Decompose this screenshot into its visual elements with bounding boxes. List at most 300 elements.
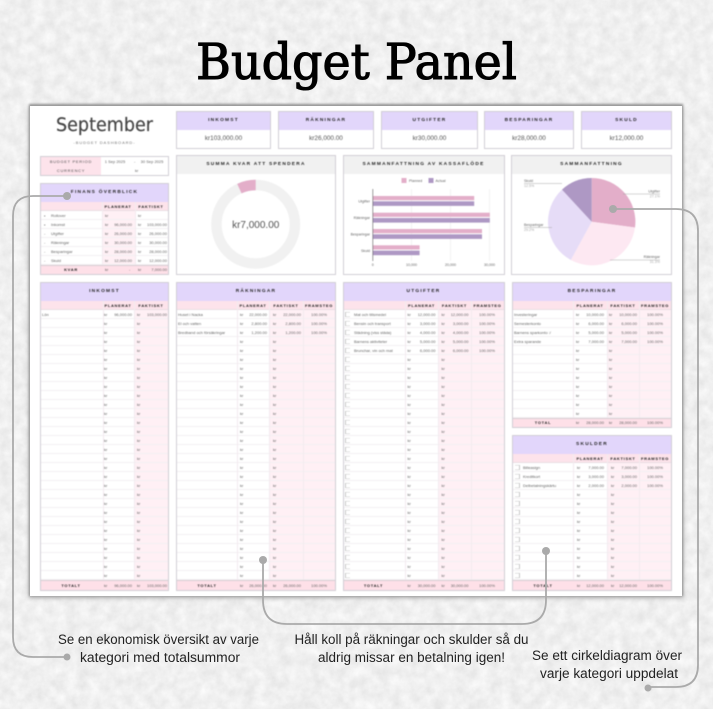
panel: finans överblick: - bbox=[44, 258, 45, 263]
table: inkomst: kr bbox=[137, 357, 140, 362]
table: skulder: 7,000.00 bbox=[588, 465, 604, 470]
table: inkomst: kr bbox=[137, 429, 140, 434]
panel: finans överblick: - bbox=[129, 267, 130, 272]
table: inkomst: kr bbox=[104, 492, 107, 497]
pie chart: 31.3% bbox=[650, 260, 661, 264]
panel: finans överblick: • bbox=[44, 213, 45, 218]
table: besparingar: kr bbox=[576, 312, 579, 317]
table: utgifter: 6,000.00 bbox=[420, 348, 436, 353]
table: skulder: Billeasign bbox=[523, 465, 540, 470]
table: inkomst: kr bbox=[104, 456, 107, 461]
table: skulder: kr bbox=[611, 474, 614, 479]
table: skulder: kr bbox=[611, 583, 614, 588]
table: besparingar: 6,000.00 bbox=[621, 321, 637, 326]
table: utgifter: kr bbox=[408, 420, 411, 425]
table: inkomst: kr bbox=[137, 348, 140, 353]
table: utgifter: kr bbox=[442, 384, 445, 389]
panel: finans överblick: kr bbox=[105, 249, 108, 254]
table: inkomst: kr bbox=[137, 492, 140, 497]
table: räkningar: kr bbox=[273, 501, 276, 506]
panel: finans överblick: kr bbox=[105, 213, 108, 218]
table: utgifter: kr bbox=[442, 447, 445, 452]
kpi card: räkningar bbox=[279, 112, 373, 148]
table: inkomst: FAKTISKT bbox=[138, 303, 164, 308]
table: räkningar: kr bbox=[273, 348, 276, 353]
bar chart: 10,000 bbox=[406, 263, 416, 267]
table: utgifter: kr bbox=[408, 375, 411, 380]
table: skulder: SKULDER bbox=[576, 442, 608, 447]
table: räkningar: kr bbox=[240, 583, 243, 588]
table: inkomst: kr bbox=[137, 573, 140, 578]
panel: finans överblick: 28,000.00 bbox=[149, 249, 167, 254]
pie chart: Räkningar bbox=[644, 255, 661, 259]
kpi card: besparingar bbox=[485, 112, 573, 148]
table: räkningar bbox=[177, 283, 335, 590]
table: utgifter: Barnens aktiviteter bbox=[354, 339, 387, 344]
table: utgifter: 4,000.00 bbox=[420, 330, 436, 335]
table: skulder: kr bbox=[611, 465, 614, 470]
table: inkomst: kr bbox=[104, 357, 107, 362]
table: räkningar: kr bbox=[240, 483, 243, 488]
kpi card: inkomst bbox=[177, 112, 270, 148]
table: inkomst: kr bbox=[137, 528, 140, 533]
table: besparingar: 100.00% bbox=[647, 312, 663, 317]
table: utgifter: FRAMSTEG bbox=[473, 303, 502, 308]
month heading: September bbox=[56, 114, 153, 136]
table: räkningar: kr bbox=[240, 402, 243, 407]
table: besparingar: kr bbox=[609, 312, 612, 317]
table: inkomst: kr bbox=[137, 537, 140, 542]
table: besparingar bbox=[513, 283, 671, 427]
table: inkomst: kr bbox=[104, 312, 107, 317]
table: inkomst: kr bbox=[104, 384, 107, 389]
kpi card: besparingar: kr28,000.00 bbox=[512, 135, 546, 142]
table: inkomst: kr bbox=[137, 393, 140, 398]
table: utgifter: kr bbox=[442, 456, 445, 461]
table: besparingar: kr bbox=[576, 393, 579, 398]
table: inkomst: kr bbox=[104, 474, 107, 479]
panel: finans överblick: 96,000.00 bbox=[114, 222, 132, 227]
table: räkningar: kr bbox=[240, 357, 243, 362]
table: inkomst: TOTALT bbox=[61, 583, 81, 588]
table: inkomst: kr bbox=[137, 465, 140, 470]
table: inkomst: kr bbox=[104, 573, 107, 578]
table: inkomst: PLANERAT bbox=[104, 303, 132, 308]
bar chart: Planned bbox=[408, 179, 422, 183]
panel: finans överblick: Utgifter bbox=[51, 231, 64, 236]
table: skulder: kr bbox=[577, 573, 580, 578]
table: räkningar: FRAMSTEG bbox=[305, 303, 333, 308]
table: utgifter: kr bbox=[408, 366, 411, 371]
table: skulder: kr bbox=[577, 537, 580, 542]
budget period box: CURRENCY bbox=[57, 168, 85, 173]
table: räkningar: kr bbox=[273, 411, 276, 416]
table: utgifter: kr bbox=[442, 393, 445, 398]
table: besparingar: kr bbox=[609, 357, 612, 362]
table: utgifter: kr bbox=[408, 321, 411, 326]
table: utgifter: kr bbox=[442, 438, 445, 443]
table: utgifter: kr bbox=[442, 573, 445, 578]
panel: finans överblick: 7,000.00 bbox=[151, 267, 167, 272]
table: inkomst: kr bbox=[137, 474, 140, 479]
caption: cirkeldiagram: varje kategori uppdelat bbox=[540, 666, 678, 681]
table: räkningar: 100.00% bbox=[311, 312, 327, 317]
table: utgifter: 30,000.00 bbox=[451, 583, 468, 588]
table: utgifter: 100.00% bbox=[479, 583, 495, 588]
table: inkomst: kr bbox=[137, 312, 140, 317]
table: räkningar: kr bbox=[273, 357, 276, 362]
budget period box: - bbox=[134, 159, 135, 164]
table: inkomst: kr bbox=[137, 438, 140, 443]
bar chart: 20,000 bbox=[444, 263, 456, 267]
table: räkningar: kr bbox=[240, 438, 243, 443]
table: inkomst: kr bbox=[137, 411, 140, 416]
bar chart bbox=[350, 177, 496, 267]
table: räkningar: kr bbox=[273, 312, 276, 317]
caption: räkningar och skulder: Håll koll på räkningar och skulder så du bbox=[294, 632, 528, 647]
table: besparingar: 10,000.00 bbox=[586, 312, 604, 317]
table: besparingar: 6,000.00 bbox=[588, 321, 604, 326]
panel: finans överblick: kr bbox=[138, 231, 141, 236]
kpi card: utgifter bbox=[382, 112, 477, 148]
table: räkningar: kr bbox=[273, 510, 276, 515]
table: besparingar: kr bbox=[576, 348, 579, 353]
table: utgifter: kr bbox=[408, 456, 411, 461]
table: besparingar: kr bbox=[609, 339, 612, 344]
table: räkningar: RÄKNINGAR bbox=[236, 289, 276, 294]
table: räkningar: kr bbox=[273, 564, 276, 569]
caption: cirkeldiagram bbox=[532, 648, 683, 681]
caption: räkningar och skulder bbox=[294, 632, 528, 665]
table: besparingar: kr bbox=[609, 411, 612, 416]
table: utgifter: 30,000.00 bbox=[418, 583, 436, 588]
table: utgifter: Städning (viss städa) bbox=[354, 330, 391, 335]
table: besparingar: kr bbox=[609, 420, 612, 425]
table: besparingar: kr bbox=[576, 384, 579, 389]
table: besparingar: 100.00% bbox=[647, 420, 663, 425]
table: inkomst: 96,000.00 bbox=[114, 312, 132, 317]
budget period box bbox=[41, 157, 168, 174]
table: inkomst: kr bbox=[104, 519, 107, 524]
table: räkningar: kr bbox=[273, 483, 276, 488]
table: utgifter: kr bbox=[442, 375, 445, 380]
table: räkningar: 100.00% bbox=[311, 583, 327, 588]
budget period box: 1 Sep 2025 bbox=[105, 159, 125, 164]
table: utgifter bbox=[344, 283, 504, 590]
table: utgifter: kr bbox=[408, 348, 411, 353]
table: utgifter: UTGIFTER bbox=[406, 289, 440, 294]
table: räkningar: kr bbox=[273, 583, 276, 588]
table: inkomst: kr bbox=[104, 546, 107, 551]
table: inkomst: kr bbox=[137, 501, 140, 506]
table: skulder: kr bbox=[611, 537, 614, 542]
panel: finans överblick: - bbox=[44, 240, 45, 245]
table: räkningar: 22,000.00 bbox=[283, 312, 301, 317]
table: besparingar: kr bbox=[576, 357, 579, 362]
kpi card: utgifter: UTGIFTER bbox=[412, 118, 446, 123]
table: utgifter: kr bbox=[408, 393, 411, 398]
panel: finans överblick: kr bbox=[138, 222, 141, 227]
table: utgifter: kr bbox=[408, 528, 411, 533]
panel: finans överblick: 103,000.00 bbox=[147, 222, 167, 227]
panel: sammanfattning: SAMMANFATTNING bbox=[560, 162, 623, 167]
table: inkomst: kr bbox=[104, 564, 107, 569]
table: räkningar: kr bbox=[240, 465, 243, 470]
table: utgifter: kr bbox=[442, 519, 445, 524]
table: räkningar: kr bbox=[240, 312, 243, 317]
table: utgifter: kr bbox=[442, 312, 445, 317]
table: räkningar: kr bbox=[240, 375, 243, 380]
caption: översikt: Se en ekonomisk översikt av varje bbox=[58, 632, 259, 647]
table: skulder: kr bbox=[611, 492, 614, 497]
pie chart: 12.5% bbox=[524, 184, 535, 188]
table: inkomst: kr bbox=[104, 321, 107, 326]
table: besparingar: kr bbox=[609, 375, 612, 380]
table: utgifter: 3,000.00 bbox=[453, 321, 468, 326]
panel: finans överblick: kr bbox=[138, 258, 141, 263]
table: räkningar: 100.00% bbox=[311, 330, 327, 335]
panel: finans överblick: kr bbox=[105, 231, 108, 236]
table: skulder: 2,000.00 bbox=[588, 483, 604, 488]
kpi card: besparingar: BESPARINGAR bbox=[505, 118, 553, 123]
table: räkningar: kr bbox=[240, 429, 243, 434]
table: skulder: kr bbox=[577, 519, 580, 524]
table: besparingar: kr bbox=[609, 366, 612, 371]
dashboard sheet bbox=[30, 106, 682, 596]
table: besparingar: kr bbox=[576, 420, 579, 425]
table: räkningar: kr bbox=[273, 492, 276, 497]
panel: finans överblick: • bbox=[44, 222, 45, 227]
table: skulder: kr bbox=[577, 483, 580, 488]
table: inkomst: kr bbox=[104, 555, 107, 560]
table: inkomst: kr bbox=[137, 564, 140, 569]
table: räkningar: kr bbox=[240, 573, 243, 578]
table: skulder: kr bbox=[577, 474, 580, 479]
table: besparingar: PLANERAT bbox=[576, 303, 604, 308]
table: utgifter: kr bbox=[442, 348, 445, 353]
table: inkomst: kr bbox=[104, 528, 107, 533]
table: räkningar: Bredband och försäkringar bbox=[178, 330, 225, 335]
pie chart: Besparingar bbox=[524, 223, 544, 227]
table: räkningar: FAKTISKT bbox=[273, 303, 299, 308]
table: skulder: kr bbox=[577, 465, 580, 470]
panel: finans överblick: Räkningar bbox=[51, 240, 69, 245]
table: utgifter: kr bbox=[408, 510, 411, 515]
table: besparingar: 7,000.00 bbox=[588, 339, 604, 344]
table: skulder: TOTALT bbox=[533, 583, 553, 588]
table: räkningar: kr bbox=[240, 420, 243, 425]
table: utgifter: kr bbox=[442, 510, 445, 515]
panel: finans överblick: PLANERAT bbox=[104, 204, 132, 209]
table: utgifter: kr bbox=[442, 537, 445, 542]
kpi card: utgifter: kr30,000.00 bbox=[413, 135, 446, 142]
table: räkningar: 22,000.00 bbox=[249, 312, 267, 317]
table: besparingar: kr bbox=[576, 411, 579, 416]
table: inkomst: kr bbox=[104, 330, 107, 335]
table: inkomst: kr bbox=[104, 510, 107, 515]
table: räkningar: kr bbox=[273, 402, 276, 407]
table: utgifter: 5,000.00 bbox=[420, 339, 436, 344]
table: utgifter: kr bbox=[442, 583, 445, 588]
panel: finans överblick: 30,000.00 bbox=[114, 240, 132, 245]
table: räkningar: El och vatten bbox=[178, 321, 201, 326]
table: inkomst: kr bbox=[104, 348, 107, 353]
table: räkningar: kr bbox=[273, 528, 276, 533]
kpi card: inkomst: INKOMST bbox=[208, 118, 239, 123]
table: utgifter: kr bbox=[442, 330, 445, 335]
table: inkomst: kr bbox=[104, 537, 107, 542]
table: utgifter: kr bbox=[408, 519, 411, 524]
panel: finans överblick: kr bbox=[105, 222, 108, 227]
table: utgifter: 100.00% bbox=[479, 330, 495, 335]
table: skulder: 12,000.00 bbox=[619, 583, 637, 588]
table: räkningar: kr bbox=[240, 501, 243, 506]
table: skulder: Delbetalningskärtu bbox=[523, 483, 556, 488]
table: utgifter: 100.00% bbox=[479, 321, 495, 326]
table: utgifter: FAKTISKT bbox=[442, 303, 467, 308]
table: räkningar: kr bbox=[273, 537, 276, 542]
table: inkomst: kr bbox=[137, 483, 140, 488]
panel: summa kvar att spendera: SUMMA KVAR ATT SPENDERA bbox=[206, 162, 306, 167]
panel: finans överblick: kr bbox=[105, 258, 108, 263]
panel: finans överblick bbox=[41, 184, 168, 274]
table: besparingar: kr bbox=[576, 321, 579, 326]
table: inkomst: kr bbox=[104, 339, 107, 344]
table: inkomst bbox=[41, 283, 168, 590]
table: räkningar: TOTALT bbox=[197, 583, 217, 588]
table: räkningar: kr bbox=[273, 339, 276, 344]
table: inkomst: kr bbox=[137, 366, 140, 371]
table: besparingar: FRAMSTEG bbox=[641, 303, 669, 308]
panel: sammanfattning av kassaflöde: SAMMANFATTNING AV KASSAFLÖDE bbox=[362, 162, 485, 167]
table: utgifter: 100.00% bbox=[479, 339, 495, 344]
table: inkomst: kr bbox=[137, 555, 140, 560]
table: räkningar: kr bbox=[240, 510, 243, 515]
table: räkningar: kr bbox=[240, 564, 243, 569]
table: inkomst: kr bbox=[104, 393, 107, 398]
pie chart bbox=[524, 178, 661, 266]
caption: översikt: kategori med totalsummor bbox=[80, 650, 241, 665]
table: skulder: PLANERAT bbox=[576, 456, 604, 461]
table: utgifter: 3,000.00 bbox=[420, 321, 436, 326]
connector: räkningar and skulder to caption bbox=[259, 547, 550, 624]
table: räkningar: Huset i Nacka bbox=[178, 312, 203, 317]
table: räkningar: kr bbox=[240, 555, 243, 560]
table: utgifter: kr bbox=[408, 492, 411, 497]
panel: finans överblick: 12,000.00 bbox=[149, 258, 167, 263]
table: utgifter: kr bbox=[442, 564, 445, 569]
table: utgifter: kr bbox=[408, 429, 411, 434]
panel: finans överblick: kr bbox=[138, 267, 141, 272]
table: räkningar: kr bbox=[240, 384, 243, 389]
table: besparingar: FAKTISKT bbox=[610, 303, 636, 308]
table: inkomst: 103,000.00 bbox=[147, 583, 167, 588]
table: besparingar: kr bbox=[576, 375, 579, 380]
table: utgifter: kr bbox=[408, 564, 411, 569]
pie chart: 27.1% bbox=[650, 194, 661, 198]
table: skulder: kr bbox=[611, 501, 614, 506]
table: skulder: kr bbox=[611, 510, 614, 515]
table: utgifter: kr bbox=[442, 555, 445, 560]
table: räkningar: 26,000.00 bbox=[283, 583, 301, 588]
table: skulder: kr bbox=[577, 501, 580, 506]
table: skulder: kr bbox=[577, 528, 580, 533]
panel: finans överblick: Inkomst bbox=[51, 222, 65, 227]
table: utgifter: kr bbox=[442, 483, 445, 488]
table: räkningar: kr bbox=[240, 393, 243, 398]
table: skulder: 100.00% bbox=[647, 483, 663, 488]
table: skulder: 100.00% bbox=[647, 465, 663, 470]
table: utgifter: kr bbox=[408, 583, 411, 588]
panel: summa kvar att spendera bbox=[177, 156, 335, 274]
table: utgifter: 100.00% bbox=[479, 348, 495, 353]
table: utgifter: kr bbox=[442, 501, 445, 506]
table: utgifter: kr bbox=[442, 474, 445, 479]
donut chart: kr7,000.00 bbox=[232, 220, 280, 231]
table: skulder: kr bbox=[577, 555, 580, 560]
donut chart bbox=[212, 179, 300, 268]
table: skulder: FRAMSTEG bbox=[641, 456, 669, 461]
table: inkomst: kr bbox=[104, 429, 107, 434]
table: utgifter: kr bbox=[442, 411, 445, 416]
table: besparingar: kr bbox=[609, 384, 612, 389]
table: utgifter: kr bbox=[442, 492, 445, 497]
budget period box: kr bbox=[135, 168, 138, 173]
kpi card: skuld: SKULD bbox=[615, 118, 638, 123]
bar chart: Räkningar bbox=[353, 216, 370, 220]
panel: finans överblick: - bbox=[44, 249, 45, 254]
table: utgifter: 100.00% bbox=[479, 312, 495, 317]
table: inkomst: kr bbox=[137, 519, 140, 524]
table: utgifter: 4,000.00 bbox=[453, 330, 468, 335]
panel: finans överblick: kr bbox=[105, 267, 108, 272]
kpi card: räkningar: RÄKNINGAR bbox=[306, 118, 346, 123]
table: utgifter: kr bbox=[442, 321, 445, 326]
table: utgifter: TOTALT bbox=[364, 583, 383, 588]
table: räkningar: kr bbox=[240, 528, 243, 533]
table: inkomst: kr bbox=[137, 583, 140, 588]
table: inkomst: 96,000.00 bbox=[114, 583, 132, 588]
table: skulder: FAKTISKT bbox=[610, 456, 636, 461]
table: skulder bbox=[513, 436, 671, 590]
table: utgifter: kr bbox=[442, 546, 445, 551]
table: inkomst: kr bbox=[137, 339, 140, 344]
table: utgifter: kr bbox=[408, 555, 411, 560]
table: utgifter: Brunchar, vin och mat bbox=[354, 348, 393, 353]
bar chart: Skuld bbox=[360, 249, 370, 253]
table: räkningar: kr bbox=[273, 555, 276, 560]
panel: finans överblick: Rollover bbox=[51, 213, 66, 218]
panel: finans överblick: Skuld bbox=[51, 258, 61, 263]
table: räkningar: kr bbox=[273, 465, 276, 470]
table: skulder: kr bbox=[611, 483, 614, 488]
table: utgifter: kr bbox=[408, 537, 411, 542]
table: besparingar: 7,000.00 bbox=[621, 339, 637, 344]
panel: sammanfattning av kassaflöde bbox=[344, 156, 504, 274]
panel: finans överblick: 30,000.00 bbox=[149, 240, 167, 245]
table: utgifter: kr bbox=[408, 501, 411, 506]
table: räkningar: kr bbox=[273, 474, 276, 479]
table: utgifter: kr bbox=[442, 465, 445, 470]
table: räkningar: kr bbox=[240, 456, 243, 461]
table: utgifter: kr bbox=[408, 330, 411, 335]
table: räkningar: kr bbox=[273, 330, 276, 335]
table: utgifter: kr bbox=[408, 384, 411, 389]
table: besparingar: Investeringar bbox=[514, 312, 537, 317]
kpi card: inkomst: kr103,000.00 bbox=[205, 135, 242, 142]
table: räkningar: kr bbox=[240, 339, 243, 344]
table: besparingar: 10,000.00 bbox=[619, 312, 637, 317]
